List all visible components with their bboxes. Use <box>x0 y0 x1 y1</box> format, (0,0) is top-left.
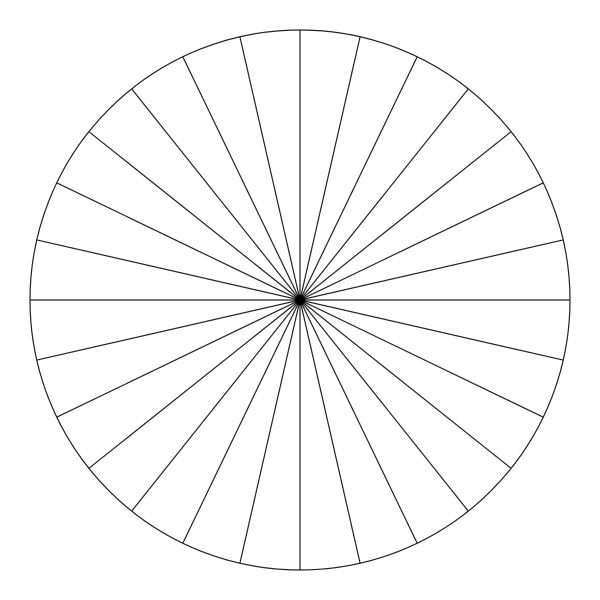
center dot <box>295 295 305 305</box>
